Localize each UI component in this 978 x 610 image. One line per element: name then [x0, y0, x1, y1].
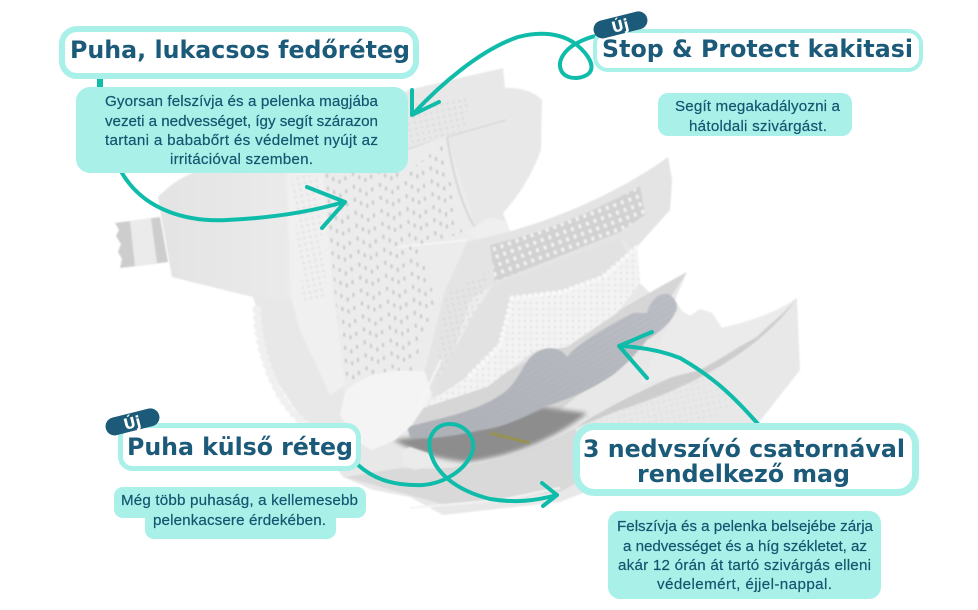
- text box: outer layer description: [114, 487, 366, 539]
- outer ruffle: [257, 310, 345, 458]
- connector stub: [97, 79, 103, 88]
- left wing: [158, 165, 300, 300]
- text box: Stop & Protect description: Segít megakadályozni a: [675, 98, 841, 115]
- right front perforated band: [418, 157, 672, 398]
- text box: lace top sheet description: tartani a bababőrt és védelmet nyújt az: [105, 132, 378, 149]
- yellow indicator line: [490, 433, 530, 443]
- text box: absorbent core description: Felszívja és a pelenka belsejébe zárja: [617, 518, 874, 535]
- front cuff line: [418, 360, 441, 408]
- badge: Új: [592, 9, 650, 41]
- lower panel seam: [397, 240, 467, 247]
- inner pale sheet: [430, 238, 640, 398]
- lower fan sheet: [345, 428, 600, 505]
- perforated lower strip: [560, 375, 740, 425]
- inner cuff line: [447, 137, 478, 232]
- heading box: 3 nedvszívó csatornával rendelkező mag: [576, 426, 916, 492]
- heading box: 3 nedvszívó csatornával rendelkező mag: 3 nedvszívó csatornával: [583, 435, 905, 463]
- arrow: absorbent core: [619, 332, 758, 424]
- grey crescent sheet: [575, 298, 797, 428]
- text box: outer layer description: Még több puhaság, a kellemesebb: [121, 492, 358, 509]
- text box: lace top sheet description: [76, 87, 408, 173]
- central lace top sheet: [323, 136, 500, 425]
- text box: Stop & Protect description: [658, 93, 852, 136]
- elastic knot: [466, 217, 510, 243]
- heading box: Puha külső réteg: [120, 426, 358, 468]
- heading box: Puha, lukacsos fedőréteg: Puha, lukacsos fedőréteg: [70, 36, 410, 64]
- diaper illustration: [115, 68, 800, 515]
- badge: Új: Új: [121, 411, 143, 434]
- text box: absorbent core description: védelemért, éjjel-nappal.: [657, 576, 832, 593]
- highlight strip: [410, 488, 560, 508]
- fastening tab: [115, 217, 168, 268]
- heading box: Puha, lukacsos fedőréteg: [62, 29, 416, 76]
- text box: lace top sheet description: vezeti a nedvességet, így segít szárazon: [105, 113, 378, 130]
- inner waistband fold: [408, 120, 506, 149]
- grey wide sheet behind core: [400, 272, 687, 428]
- top waistband: [408, 95, 470, 147]
- heading box: Stop & Protect kakitasi: Stop & Protect kakitasi: [602, 35, 913, 63]
- text box: absorbent core description: [608, 511, 881, 599]
- crumpled pale tag: [402, 447, 436, 470]
- dark core shadow: [393, 407, 587, 462]
- arrow: lace top sheet: [122, 173, 345, 228]
- text box: outer layer description: pelenkacsere érdekében.: [153, 512, 326, 529]
- fluffy absorbent layer: [417, 247, 640, 410]
- absorbent core channels: [407, 294, 677, 438]
- side stitched band: [287, 172, 345, 395]
- arrow: waistband with loop: [412, 34, 596, 115]
- badge: Új: Új: [609, 14, 631, 37]
- arrow: outer layer with loop: [358, 424, 557, 506]
- heading box: Puha külső réteg: Puha külső réteg: [127, 433, 353, 461]
- front fluffy ruffle: [340, 371, 432, 450]
- heading box: 3 nedvszívó csatornával rendelkező mag: rendelkező mag: [637, 460, 850, 488]
- text box: lace top sheet description: Gyorsan felszívja és a pelenka magjába: [105, 93, 379, 110]
- badge: Új: [104, 406, 162, 438]
- pleated side panel: [640, 298, 797, 385]
- text box: absorbent core description: akár 12 órán át tartó szivárgás elleni: [618, 557, 871, 574]
- heading box: Stop & Protect kakitasi: [595, 31, 921, 70]
- overall silhouette: [158, 68, 800, 515]
- text box: Stop & Protect description: hátoldali szivárgást.: [689, 118, 827, 135]
- text box: lace top sheet description: irritációval szemben.: [170, 151, 313, 168]
- text box: absorbent core description: a nedvességet és a híg székletet, az: [623, 538, 867, 555]
